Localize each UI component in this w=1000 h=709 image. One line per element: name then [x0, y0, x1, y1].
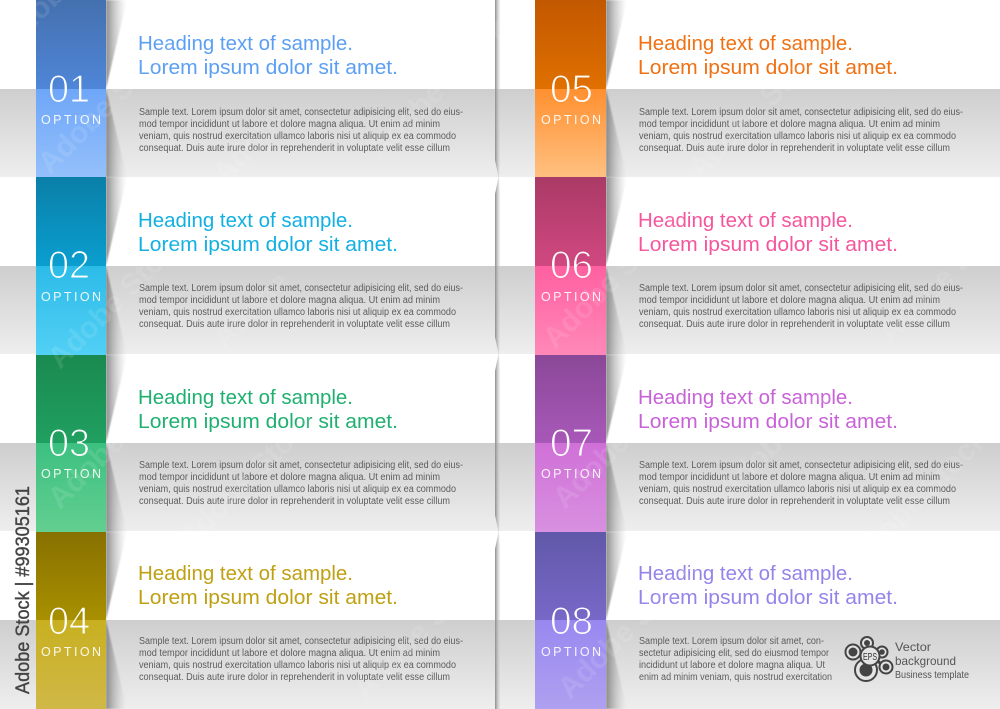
- panel: option 02: [36, 177, 463, 355]
- panel: option 01: [36, 0, 463, 177]
- icon: EPS circles logo: [846, 637, 892, 681]
- panel: option 05: Heading text of sample.: [638, 33, 853, 55]
- watermark text: Adobe Stock: [537, 202, 690, 355]
- watermark text: Adobe Stock: [42, 222, 195, 375]
- panel: option 07: [535, 355, 963, 532]
- panel: option 03: [36, 355, 463, 532]
- panel: option 01: 01: [48, 68, 90, 111]
- panel: option 05: OPTION: [541, 113, 601, 127]
- panel: option 06: mod tempor incididunt ut labore et dolore magna aliqua. Ut enim ad minim: [639, 295, 940, 306]
- watermark text: Adobe: [207, 101, 296, 190]
- panel: option 08: Heading text of sample.: [638, 563, 853, 585]
- panel: option 03: OPTION: [41, 467, 101, 481]
- watermark text: Adobe Stock: [347, 552, 500, 705]
- panel: option 02: Heading text of sample.: [138, 210, 353, 232]
- watermark text: Adobe Stock: [362, 12, 515, 165]
- watermark text: Adobe: [547, 426, 636, 515]
- panel: option 01: Lorem ipsum dolor sit amet.: [138, 57, 398, 79]
- watermark text: Adobe Stock: [712, 352, 865, 505]
- panel: option 06: OPTION: [541, 290, 601, 304]
- panel: option 07: Sample text. Lorem ipsum dolor sit amet, consectetur adipisicing elit, sed do eius-: [639, 460, 963, 471]
- panel: option 05: Lorem ipsum dolor sit amet.: [638, 57, 898, 79]
- panel: option 05: veniam, quis nostrud exercitation ullamco laboris nisi ut aliquip ex ea commodo: [639, 131, 956, 142]
- panel: option 02: consequat. Duis aute irure dolor in reprehenderit in voluptate velit esse cillum: [139, 319, 450, 330]
- panel: option 04: Sample text. Lorem ipsum dolor sit amet, consectetur adipisicing elit, sed do eius-: [139, 636, 463, 647]
- panel: option 08: incididunt ut labore et dolore magna aliqua. Ut: [639, 660, 825, 671]
- panel: option 02: 02: [48, 244, 90, 287]
- panel: option 08: OPTION: [541, 645, 601, 659]
- text block: vector background label: [895, 640, 969, 681]
- panel: option 06: [535, 177, 963, 355]
- panel: option 06: Heading text of sample.: [638, 210, 853, 232]
- panel: option 06: Sample text. Lorem ipsum dolor sit amet, consectetur adipisicing elit, sed do eius-: [639, 283, 963, 294]
- panel: option 07: OPTION: [541, 467, 601, 481]
- panel: option 01: Heading text of sample.: [138, 33, 353, 55]
- panel: option 03: consequat. Duis aute irure dolor in reprehenderit in voluptate velit esse cillum: [139, 496, 450, 507]
- panel: option 06: 06: [550, 244, 593, 287]
- panel: option 02: Lorem ipsum dolor sit amet.: [138, 234, 398, 256]
- panel: option 07: veniam, quis nostrud exercitation ullamco laboris nisi ut aliquip ex ea commodo: [639, 484, 956, 495]
- text block: vector background label: background: [895, 654, 956, 668]
- icon: EPS circles logo: EPS: [863, 652, 877, 663]
- panel: option 04: consequat. Duis aute irure dolor in reprehenderit in voluptate velit esse cillum: [139, 672, 450, 683]
- panel: option 08: sectetur adipisicing elit, sed do eiusmod tempor: [639, 648, 830, 659]
- panel: option 03: Lorem ipsum dolor sit amet.: [138, 411, 398, 433]
- panel: option 06: Lorem ipsum dolor sit amet.: [638, 234, 898, 256]
- panel: option 08: Sample text. Lorem ipsum dolor sit amet, con-: [639, 636, 824, 647]
- panel: option 06: veniam, quis nostrud exercitation ullamco laboris nisi ut aliquip ex ea commodo: [639, 307, 956, 318]
- panel: option 03: veniam, quis nostrud exercitation ullamco laboris nisi ut aliquip ex ea commodo: [139, 484, 456, 495]
- panel: option 02: OPTION: [41, 290, 101, 304]
- panel: option 05: 05: [550, 68, 593, 111]
- panel: option 03: Heading text of sample.: [138, 387, 353, 409]
- panel: option 02: Sample text. Lorem ipsum dolor sit amet, consectetur adipisicing elit, sed do eius-: [139, 283, 463, 294]
- stock id vertical text: Adobe Stock | #99305161: [13, 486, 34, 694]
- panel: option 01: veniam, quis nostrud exercitation ullamco laboris nisi ut aliquip ex ea commodo: [139, 131, 456, 142]
- panel: option 01: mod tempor incididunt ut labore et dolore magna aliqua. Ut enim ad minim: [139, 119, 440, 130]
- panel: option 01: consequat. Duis aute irure dolor in reprehenderit in voluptate velit esse cillum: [139, 143, 450, 154]
- panel: option 04: veniam, quis nostrud exercitation ullamco laboris nisi ut aliquip ex ea commodo: [139, 660, 456, 671]
- panel: option 01: OPTION: [41, 113, 101, 127]
- panel: option 03: 03: [48, 422, 90, 465]
- panel: option 08: enim ad minim veniam, quis nostrud exercitation: [639, 672, 832, 683]
- watermark text: Adobe: [42, 426, 131, 515]
- text block: vector background label: Vector: [895, 640, 931, 654]
- panel: option 07: 07: [550, 422, 593, 465]
- watermark text: Adobe Stock: [552, 552, 705, 705]
- panel: option 04: [36, 532, 463, 709]
- panel: option 03: Sample text. Lorem ipsum dolor sit amet, consectetur adipisicing elit, sed do eius-: [139, 460, 463, 471]
- watermark text: Adobe Stock: [682, 32, 835, 185]
- panel: option 07: Lorem ipsum dolor sit amet.: [638, 411, 898, 433]
- panel: option 03: mod tempor incididunt ut labore et dolore magna aliqua. Ut enim ad minim: [139, 472, 440, 483]
- panel: option 07: consequat. Duis aute irure dolor in reprehenderit in voluptate velit esse cillum: [639, 496, 950, 507]
- watermark text: Adobe Stock: [842, 422, 995, 575]
- watermark text: Adobe: [207, 266, 296, 355]
- panel: option 05: mod tempor incididunt ut labore et dolore magna aliqua. Ut enim ad minim: [639, 119, 940, 130]
- panel: option 06: consequat. Duis aute irure dolor in reprehenderit in voluptate velit esse cillum: [639, 319, 950, 330]
- panel: option 08: [535, 532, 898, 709]
- text block: vector background label: Business template: [895, 670, 969, 681]
- panel: option 07: mod tempor incididunt ut labore et dolore magna aliqua. Ut enim ad minim: [639, 472, 940, 483]
- panel: option 04: Lorem ipsum dolor sit amet.: [138, 587, 398, 609]
- panel: option 04: OPTION: [41, 645, 101, 659]
- watermark text: Adobe Stock: [172, 402, 325, 555]
- panel: option 08: Lorem ipsum dolor sit amet.: [638, 587, 898, 609]
- panel: option 05: consequat. Duis aute irure dolor in reprehenderit in voluptate velit esse cillum: [639, 143, 950, 154]
- panel: option 04: mod tempor incididunt ut labore et dolore magna aliqua. Ut enim ad minim: [139, 648, 440, 659]
- panel: option 07: Heading text of sample.: [638, 387, 853, 409]
- panel: option 04: 04: [48, 600, 90, 643]
- panel: option 04: Heading text of sample.: [138, 563, 353, 585]
- panel: option 05: [535, 0, 963, 177]
- panel: option 02: mod tempor incididunt ut labore et dolore magna aliqua. Ut enim ad minim: [139, 295, 440, 306]
- panel: option 01: Sample text. Lorem ipsum dolor sit amet, consectetur adipisicing elit, sed do eius-: [139, 107, 463, 118]
- panel: option 02: veniam, quis nostrud exercitation ullamco laboris nisi ut aliquip ex ea commodo: [139, 307, 456, 318]
- panel: option 05: Sample text. Lorem ipsum dolor sit amet, consectetur adipisicing elit, sed do eius-: [639, 107, 963, 118]
- panel: option 08: 08: [550, 600, 593, 643]
- watermark text: Adobe Stock: [32, 27, 185, 180]
